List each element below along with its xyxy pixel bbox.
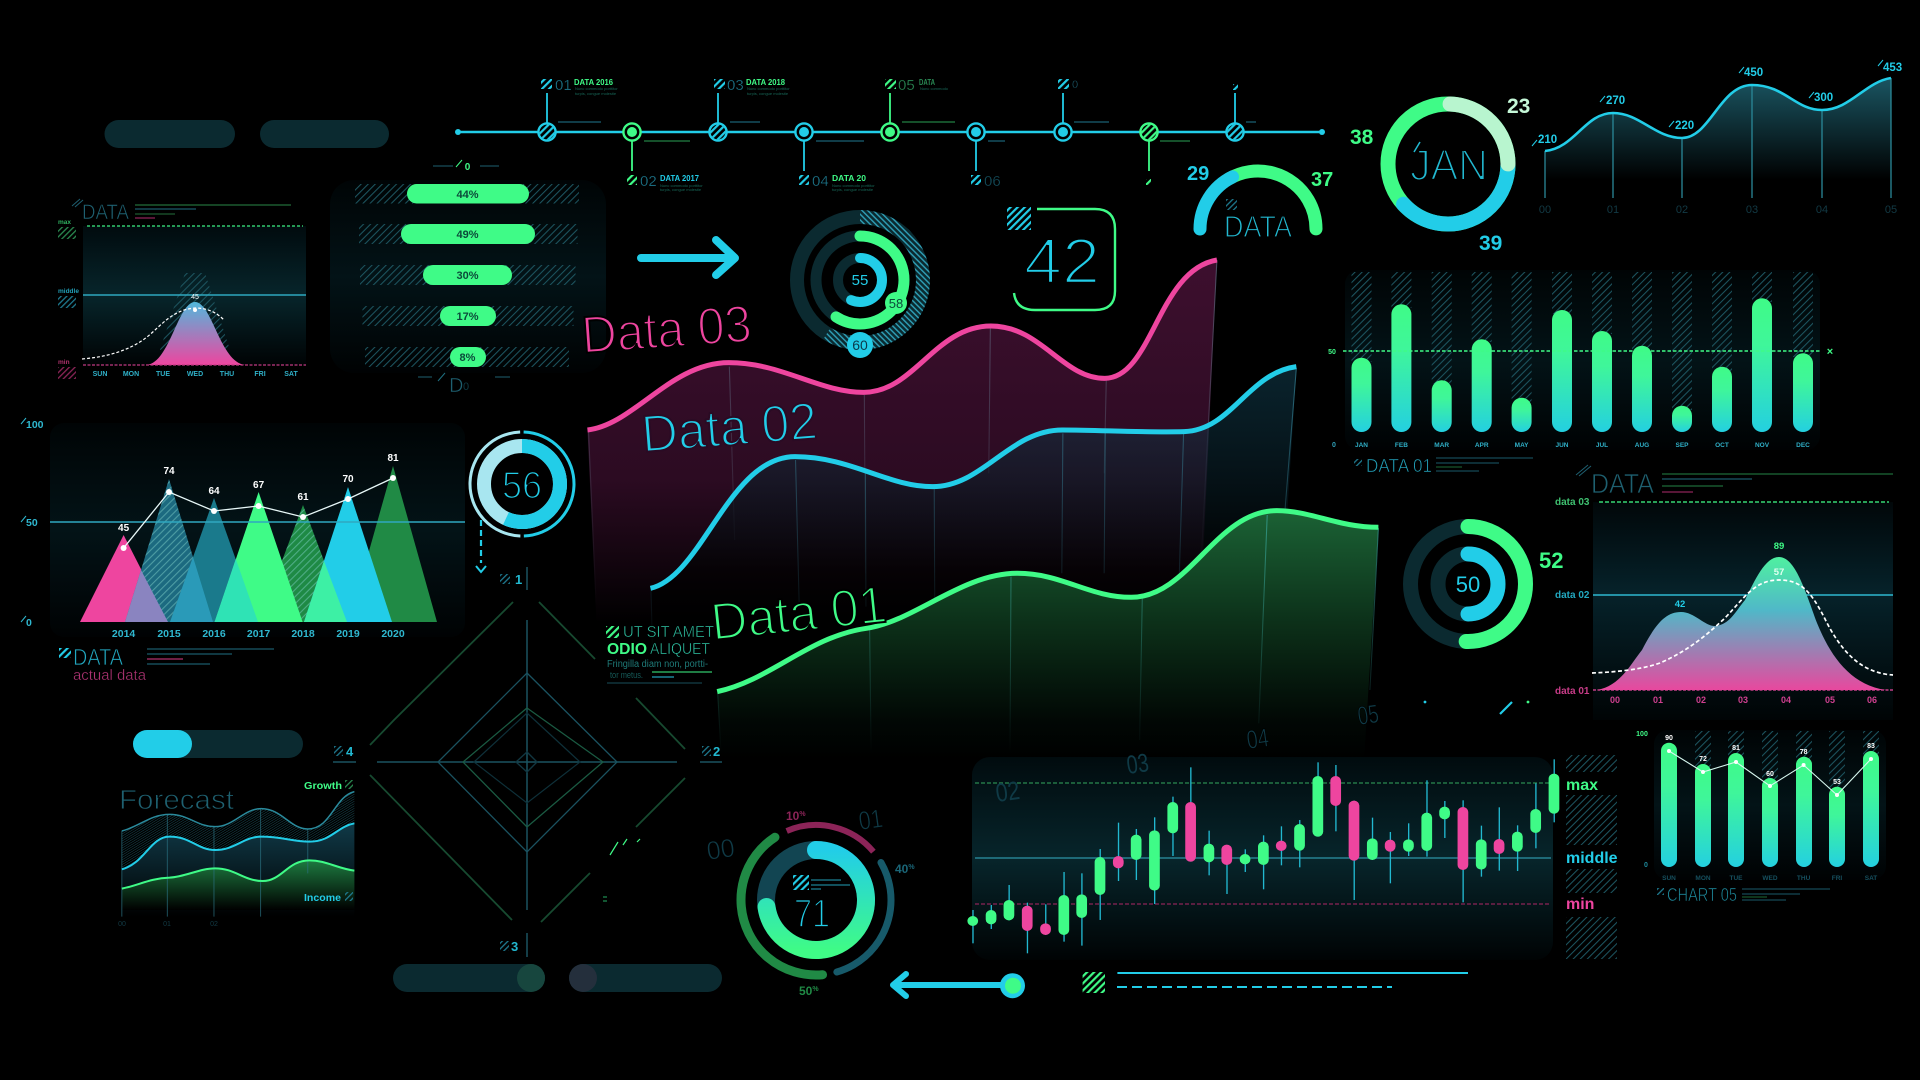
trend line	[121, 475, 396, 551]
level hatches	[1566, 755, 1617, 959]
bottom pill right	[569, 964, 722, 992]
timeline: Nunc commodo porttitor	[832, 183, 875, 188]
year labels: 2017	[247, 628, 270, 640]
bottom legend lines	[1083, 972, 1468, 993]
axis labels: 02	[210, 921, 218, 928]
value labels: 67	[253, 480, 265, 491]
year numbers: 0	[1072, 79, 1078, 91]
heading: data: DATA	[82, 201, 129, 224]
hatch tracks	[355, 184, 579, 367]
gauge data: 29	[1187, 163, 1209, 185]
axis labels: 00	[118, 921, 126, 928]
label: data 01: Data 01	[708, 576, 889, 652]
day labels: THU	[1797, 875, 1811, 882]
monthly bar chart	[1328, 270, 1833, 476]
month labels	[1355, 442, 1810, 449]
trend	[1667, 749, 1873, 797]
value labels: 70	[342, 474, 354, 485]
main chart: data 02 area	[650, 367, 1297, 723]
month labels: AUG	[1635, 442, 1649, 449]
peak values: 57	[1774, 567, 1784, 578]
x labels: 03	[1738, 695, 1748, 705]
chart 05 bars	[1636, 730, 1886, 905]
monthly bar chart: ×	[1827, 346, 1833, 358]
level labels: max	[1566, 777, 1598, 794]
value box 42: 42	[1024, 225, 1100, 297]
weekday labels	[93, 371, 298, 378]
chart 05 bars: 0	[1644, 862, 1648, 869]
axis labels: 00	[1539, 204, 1551, 216]
donut 71	[714, 798, 918, 1002]
year captions: DATA 20	[832, 173, 866, 183]
values: 90	[1665, 735, 1673, 742]
x labels: 05	[1825, 695, 1835, 705]
axis labels: 1	[515, 572, 522, 587]
outer diamond	[370, 602, 685, 922]
year labels: 2020	[381, 628, 405, 640]
chart axis labels: 04	[1245, 722, 1271, 755]
caption chart 05	[1657, 885, 1830, 905]
caption data	[59, 644, 274, 684]
value labels: 74	[163, 466, 175, 477]
x labels: 06	[1867, 695, 1877, 705]
axis labels: data 03	[1555, 497, 1590, 508]
growth label: Growth	[304, 780, 342, 792]
percent labels	[786, 809, 915, 998]
tick dashes	[558, 122, 1256, 141]
year captions: DATA 2018	[746, 77, 785, 87]
hatch columns	[1352, 272, 1813, 410]
timeline: Nunc commodo	[920, 86, 949, 91]
values: 220	[1675, 120, 1694, 132]
area	[1597, 557, 1886, 690]
year captions: DATA 2017	[660, 173, 699, 183]
values: 78	[1800, 749, 1808, 756]
month labels: JAN	[1355, 442, 1368, 449]
line chart top right	[1532, 60, 1902, 216]
percent labels: %	[799, 811, 806, 818]
y labels: 50	[26, 517, 38, 529]
year captions: DATA 2016	[574, 77, 613, 87]
bar values: 30%	[456, 270, 479, 282]
y labels	[26, 419, 44, 629]
caption data 01: DATA 01	[1366, 456, 1432, 476]
donut JAN: 38	[1350, 126, 1374, 149]
chart axis labels: 03	[1125, 747, 1151, 780]
bars	[401, 184, 535, 367]
values: 453	[1883, 62, 1902, 74]
bottom pill left	[393, 964, 545, 992]
donut JAN: 23	[1507, 95, 1530, 118]
values: 81	[1732, 745, 1740, 752]
panel: horizontal percentage bars: D	[449, 375, 463, 397]
bar values	[456, 189, 479, 364]
blue slider pill	[133, 730, 303, 758]
year labels	[112, 628, 405, 640]
donut 50: 50	[1456, 572, 1480, 597]
percent labels: 50	[799, 984, 812, 998]
peak values	[1675, 541, 1784, 610]
value labels: 81	[387, 453, 399, 464]
percent labels: %	[908, 864, 915, 871]
x labels	[1610, 695, 1877, 705]
percent labels: 40	[895, 862, 908, 876]
ring 56: 56	[502, 465, 542, 507]
bars	[1352, 298, 1813, 432]
axis labels: 03	[1746, 204, 1758, 216]
day labels: MON	[1695, 875, 1711, 882]
x labels: 02	[1696, 695, 1706, 705]
x labels: 04	[1781, 695, 1791, 705]
bar values: 17%	[456, 311, 479, 323]
year captions	[574, 77, 935, 183]
panel: horizontal percentage bars	[330, 160, 606, 397]
axis labels: 01	[163, 921, 171, 928]
bars	[1661, 743, 1879, 867]
axis labels: 3	[511, 939, 518, 954]
weekday labels: MON	[123, 371, 139, 378]
day labels	[1662, 875, 1877, 882]
side labels: middle	[58, 288, 79, 295]
day labels: FRI	[1832, 875, 1842, 882]
axis labels: data 01	[1555, 686, 1590, 697]
values: 210	[1538, 134, 1557, 146]
label: data 02: Data 02	[639, 392, 819, 464]
donut JAN	[1350, 95, 1530, 255]
hatch marks	[541, 79, 1238, 185]
values	[1665, 735, 1875, 786]
heading: data	[72, 199, 291, 224]
text block: ut sit amet: tor metus.	[610, 670, 643, 680]
forecast heading: Forecast	[119, 784, 234, 815]
text block: ut sit amet: UT SIT AMET	[623, 624, 714, 641]
panel: data distribution area chart	[1555, 465, 1893, 720]
axis labels: 05	[1885, 204, 1897, 216]
values	[1538, 62, 1902, 146]
year labels: 2018	[291, 628, 315, 640]
text block: ut sit amet: ALIQUET	[650, 641, 710, 658]
monthly bar chart: 50	[1328, 349, 1336, 356]
caption data: actual data	[73, 667, 147, 684]
level labels	[1566, 777, 1618, 913]
top pills	[104, 120, 389, 148]
side labels: min	[58, 359, 70, 366]
gauge data: 37	[1311, 169, 1333, 191]
badge 58	[885, 292, 907, 314]
chart axis labels: 05	[1356, 698, 1381, 731]
weekday labels: THU	[220, 371, 234, 378]
middle line	[1593, 594, 1893, 596]
chart 05 bars: 100	[1636, 731, 1648, 738]
nodes	[538, 123, 1244, 141]
panel: horizontal percentage bars: 0	[463, 381, 469, 393]
timeline: Nunc commodo porttitor	[575, 86, 618, 91]
year numbers: 05	[898, 77, 915, 94]
main chart: data 01 area	[717, 511, 1379, 760]
chart axis labels: 00	[705, 832, 737, 866]
month labels: JUL	[1596, 442, 1608, 449]
axis labels	[1539, 204, 1897, 216]
values: 83	[1867, 743, 1875, 750]
month labels: APR	[1475, 442, 1489, 449]
timeline: turpis, congue molestie	[660, 187, 702, 192]
level labels: min	[1566, 896, 1594, 913]
y labels: 100	[26, 419, 44, 431]
weekday labels: TUE	[156, 371, 170, 378]
percent labels: %	[812, 986, 819, 993]
value labels: 64	[208, 486, 220, 497]
peak values: 42	[1675, 599, 1685, 610]
heading: data: DATA	[1591, 468, 1654, 499]
badge 58: 58	[889, 296, 903, 311]
values: 450	[1744, 67, 1763, 79]
gauge data	[1179, 150, 1337, 308]
chart axis labels: 01	[857, 803, 885, 836]
values: 60	[1766, 771, 1774, 778]
panel: small data bell chart: 45	[191, 294, 199, 301]
value labels: 61	[297, 492, 309, 503]
year numbers: 06	[984, 173, 1001, 190]
day labels: SAT	[1865, 875, 1877, 882]
text block: ut sit amet	[606, 624, 714, 683]
year labels: 2014	[112, 628, 135, 640]
month labels: JUN	[1555, 442, 1569, 449]
arrow: left with knob	[893, 973, 1025, 998]
x labels: 00	[1610, 695, 1620, 705]
axis labels: 2	[713, 744, 720, 759]
axis labels	[334, 572, 720, 954]
value labels	[118, 453, 399, 534]
weekday labels: SUN	[93, 371, 107, 378]
donut 50: 52	[1539, 548, 1563, 573]
small marks	[1339, 701, 1529, 714]
percent labels: 10	[786, 809, 799, 823]
label: data 03: Data 03	[580, 295, 753, 365]
axis labels: 4	[346, 744, 354, 759]
panel: horizontal percentage bars: 0	[465, 162, 471, 173]
month labels: SEP	[1675, 442, 1689, 449]
year numbers: 02	[640, 173, 657, 190]
value box 42	[1007, 207, 1115, 310]
timeline: Nunc commodo porttitor	[747, 86, 790, 91]
year labels: 2015	[157, 628, 181, 640]
axis labels: 04	[1816, 204, 1828, 216]
month labels: NOV	[1755, 442, 1770, 449]
stems	[547, 93, 1235, 171]
year captions: DATA	[919, 77, 935, 87]
day labels: WED	[1762, 875, 1778, 882]
text block: ut sit amet: Fringilla diam non, portti-	[607, 659, 708, 670]
values: 72	[1699, 756, 1707, 763]
hatch columns	[1695, 731, 1879, 796]
gauge data: DATA	[1224, 209, 1292, 244]
caption chart 05: CHART 05	[1667, 885, 1737, 905]
level labels: middle	[1566, 850, 1618, 867]
y labels: 0	[26, 617, 32, 629]
concentric rings: 55	[852, 272, 868, 289]
side labels: max	[58, 219, 71, 226]
bar values: 8%	[460, 352, 476, 364]
bar values: 49%	[456, 229, 479, 241]
badge 60	[847, 332, 873, 358]
values: 270	[1606, 95, 1625, 107]
bell area	[147, 302, 245, 365]
axis labels: 02	[1676, 204, 1688, 216]
monthly bar chart: 0	[1332, 442, 1336, 449]
candlestick chart	[967, 755, 1618, 960]
day labels: TUE	[1730, 875, 1743, 882]
candles	[967, 759, 1559, 953]
income label: Income	[304, 892, 341, 904]
day labels: SUN	[1662, 875, 1676, 882]
weekday labels: SAT	[284, 371, 298, 378]
weekday labels: FRI	[254, 371, 266, 378]
timeline: turpis, congue molestie	[832, 187, 874, 192]
arrow: right	[641, 240, 735, 275]
donut JAN: 39	[1479, 232, 1502, 255]
badge 60: 60	[852, 337, 868, 353]
month labels: OCT	[1715, 442, 1729, 449]
radar chart	[333, 567, 722, 957]
panel: small data bell chart	[58, 199, 306, 379]
chart axis labels	[705, 698, 1381, 866]
weekday labels: WED	[187, 371, 203, 378]
dashed arrow	[480, 520, 482, 563]
donut 50	[1410, 526, 1563, 642]
axis labels	[1555, 497, 1590, 697]
year numbers: 04	[812, 173, 829, 190]
timeline: turpis, congue molestie	[747, 91, 789, 96]
timeline: turpis, congue molestie	[575, 91, 617, 96]
axis labels	[118, 921, 218, 928]
value labels: 45	[118, 523, 130, 534]
donut JAN: JAN	[1410, 141, 1488, 190]
bar values: 44%	[456, 189, 479, 201]
caption data 01	[1354, 456, 1533, 476]
concentric rings	[797, 217, 923, 358]
donut 71: 71	[794, 892, 830, 936]
month labels: MAY	[1515, 442, 1529, 449]
timeline: Nunc commodo porttitor	[660, 183, 703, 188]
side labels	[58, 219, 79, 379]
year numbers: 03	[727, 77, 744, 94]
year labels: 2016	[202, 628, 226, 640]
year numbers: 01	[555, 77, 572, 94]
axis labels: data 02	[1555, 590, 1590, 601]
text block: ut sit amet: ODIO	[607, 641, 647, 658]
curves	[122, 792, 354, 917]
month labels: FEB	[1395, 442, 1408, 449]
timeline	[455, 77, 1325, 192]
forecast chart	[118, 780, 354, 928]
month labels: DEC	[1796, 442, 1810, 449]
year numbers	[555, 77, 1078, 190]
triangles	[80, 466, 437, 622]
values: 53	[1833, 779, 1841, 786]
x labels: 01	[1653, 695, 1663, 705]
axis labels: 01	[1607, 204, 1619, 216]
values: 300	[1814, 92, 1833, 104]
month labels: MAR	[1434, 442, 1449, 449]
heading: data	[1576, 465, 1893, 499]
main chart: data 03 area	[587, 260, 1217, 623]
chart axis labels: 02	[994, 775, 1022, 808]
triangle chart	[21, 418, 465, 684]
peak values: 89	[1774, 541, 1784, 552]
caption data: DATA	[73, 644, 124, 670]
year labels: 2019	[336, 628, 360, 640]
ring 56	[468, 430, 576, 572]
